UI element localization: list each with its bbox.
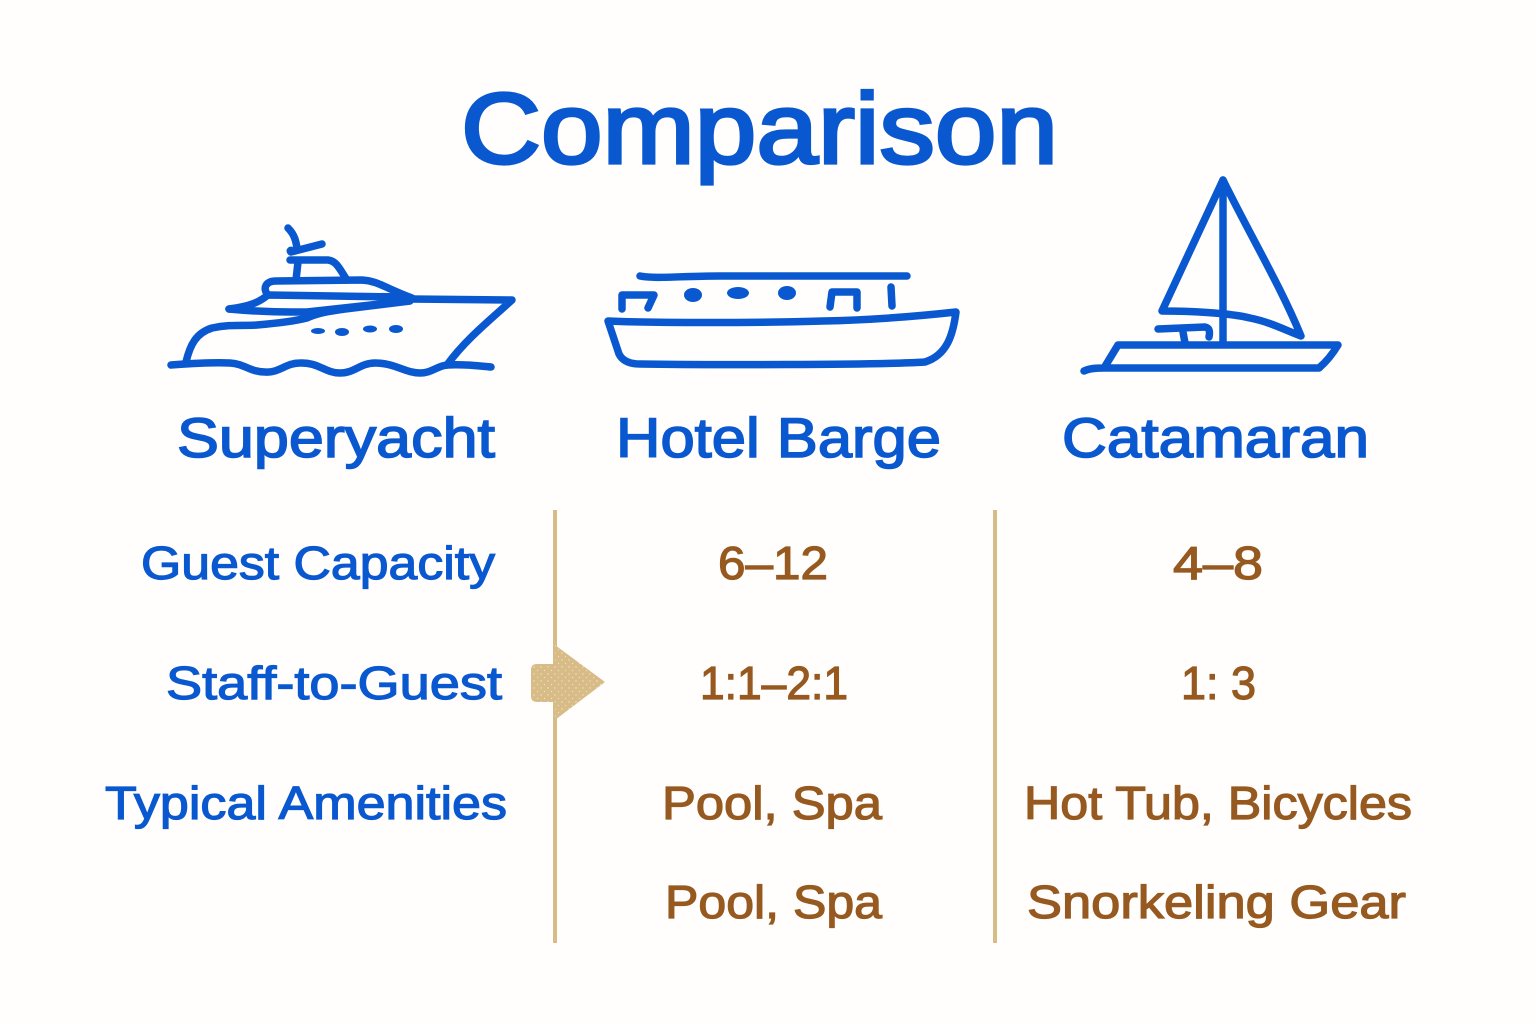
value: barge staff ratio: 1:1–2:1	[700, 657, 848, 709]
row label: Typical Amenities: Typical Amenities	[105, 777, 507, 829]
value: barge capacity: 6–12	[718, 537, 828, 589]
row label: Guest Capacity: Guest Capacity	[141, 537, 495, 589]
heading: Catamaran: Catamaran	[1062, 406, 1369, 469]
divider: column two	[993, 510, 997, 943]
heading: Hotel Barge: Hotel Barge	[616, 406, 941, 469]
value: catamaran amenities line two: Snorkeling Gear	[1027, 876, 1406, 928]
value: catamaran staff ratio: 1: 3	[1181, 657, 1256, 709]
row label: Staff-to-Guest: Staff-to-Guest	[166, 657, 502, 709]
divider: column one	[553, 510, 557, 943]
icon: hotel barge	[608, 276, 956, 365]
heading: Superyacht: Superyacht	[177, 406, 495, 469]
arrow	[531, 645, 605, 720]
value: barge amenities line two: Pool, Spa	[665, 876, 882, 928]
value: barge amenities line one: Pool, Spa	[662, 777, 882, 829]
title: Comparison	[461, 73, 1058, 185]
value: catamaran amenities line one: Hot Tub, Bicycles	[1024, 777, 1412, 829]
icon: catamaran	[1084, 180, 1338, 371]
value: catamaran capacity: 4–8	[1173, 537, 1263, 589]
icon: superyacht	[171, 228, 512, 373]
